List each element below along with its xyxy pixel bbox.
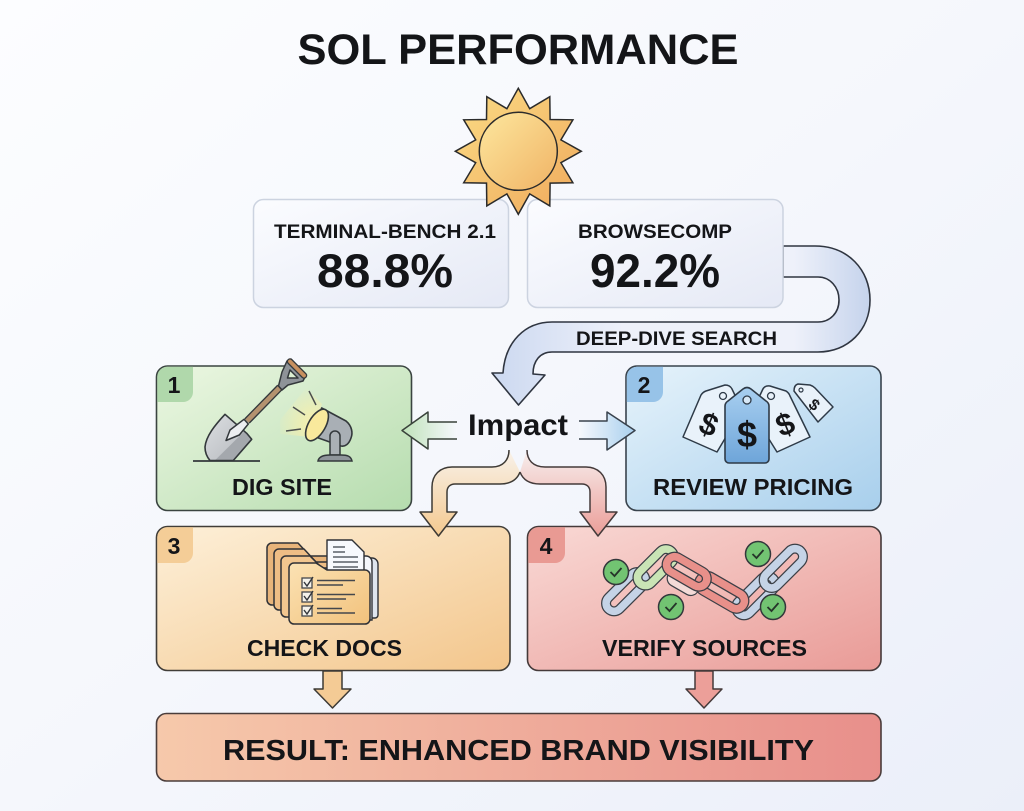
arrow: deep-dive search: DEEP-DIVE SEARCH — [576, 328, 777, 350]
arrow: impact to check docs — [420, 450, 520, 536]
result banner: RESULT: ENHANCED BRAND VISIBILITY — [223, 735, 814, 767]
arrow: check docs to result — [314, 671, 351, 708]
label: review pricing: REVIEW PRICING — [653, 474, 853, 500]
checklist — [302, 577, 355, 616]
panel: BrowseComp: 92.2% — [590, 244, 720, 297]
icon: sun — [455, 88, 581, 214]
icon: spotlight — [280, 388, 352, 461]
panel 4: verify sources — [528, 526, 881, 670]
panel: Terminal-Bench 2.1: 88.8% — [317, 244, 453, 297]
badge 2 — [627, 367, 663, 402]
panel: Terminal-Bench 2.1: TERMINAL-BENCH 2.1 — [274, 221, 496, 243]
centre tag — [725, 388, 769, 463]
arrow: impact to verify sources — [520, 450, 617, 536]
badge 4 — [528, 527, 565, 563]
icon: document folders — [267, 540, 378, 624]
small tag: $ — [805, 396, 823, 415]
paper — [327, 540, 364, 572]
panel 3: check docs — [156, 526, 510, 670]
panel 2: review pricing — [626, 366, 881, 510]
small tag — [794, 384, 833, 422]
left tag: $ — [694, 405, 723, 444]
badge 3: 3 — [168, 533, 180, 559]
label: impact: Impact — [468, 409, 568, 442]
left tag — [683, 385, 742, 452]
result banner — [156, 714, 881, 781]
right tag — [752, 386, 810, 452]
badge 1: 1 — [168, 372, 181, 398]
arrow: deep-dive search — [492, 246, 870, 405]
label: check docs: CHECK DOCS — [247, 635, 402, 661]
arrow: impact to review pricing — [579, 412, 635, 450]
badge 1 — [157, 367, 193, 402]
panel 1: dig site — [156, 359, 412, 510]
right tag: $ — [771, 405, 800, 444]
panel: Terminal-Bench 2.1 — [254, 200, 508, 308]
panel: BrowseComp — [528, 200, 783, 308]
label: verify sources: VERIFY SOURCES — [602, 635, 807, 661]
label: dig site: DIG SITE — [232, 474, 332, 500]
icon: price tags — [683, 384, 833, 463]
title: SOL PERFORMANCE — [298, 26, 738, 74]
badge 2: 2 — [638, 372, 650, 398]
arrow: impact to dig site — [402, 412, 457, 449]
icon: shovel — [193, 359, 306, 461]
icon: chain links — [603, 542, 806, 620]
check badges — [604, 542, 786, 620]
panel: BrowseComp: BROWSECOMP — [578, 221, 732, 243]
centre tag: $ — [737, 414, 757, 455]
arrow: verify sources to result — [686, 671, 722, 708]
badge 4: 4 — [540, 533, 553, 559]
badge 3 — [157, 527, 193, 563]
